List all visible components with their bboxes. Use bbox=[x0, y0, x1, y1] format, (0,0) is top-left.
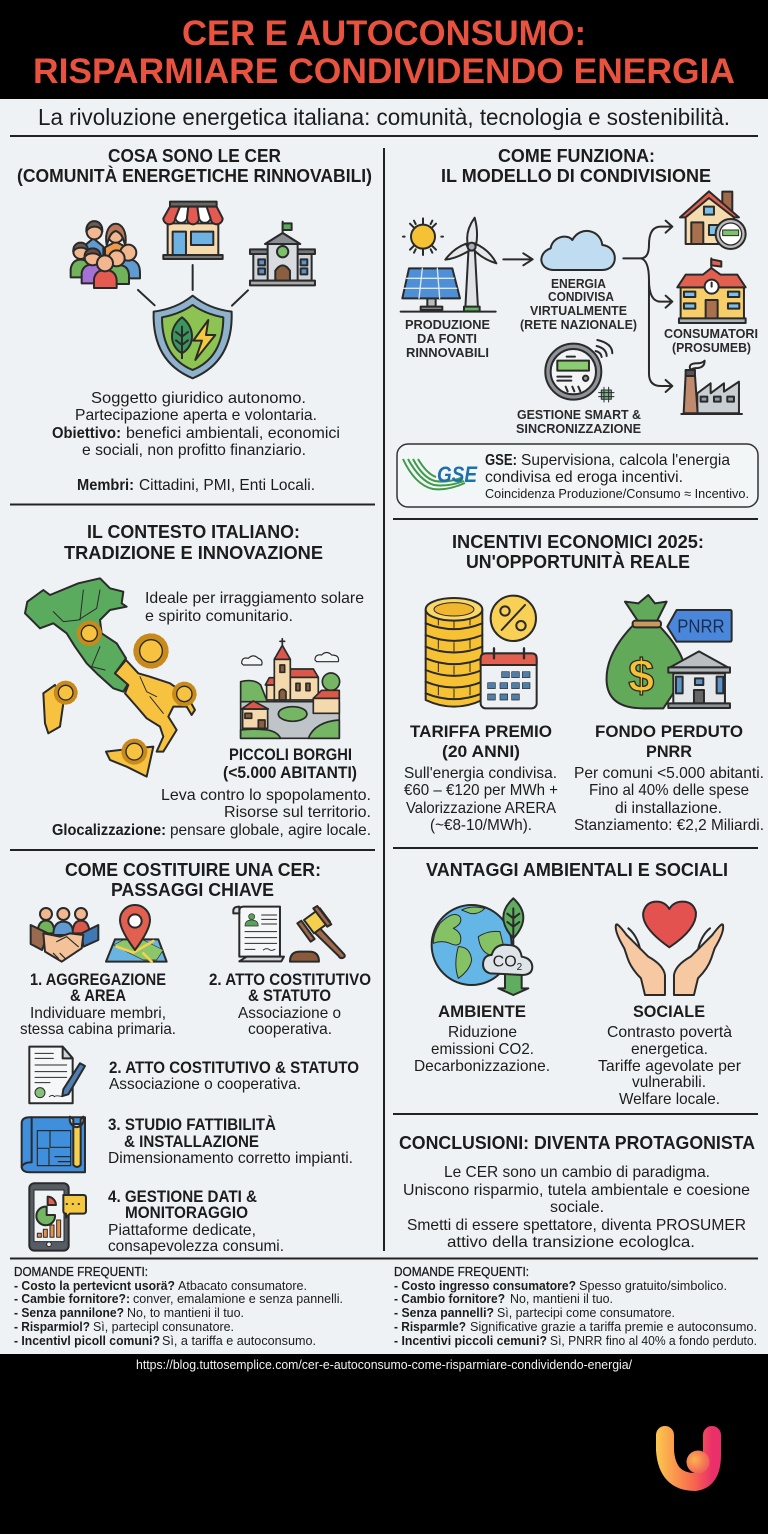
labels: tariffa premio: €60 – €120 per MWh + bbox=[404, 782, 558, 799]
icon: statute document bbox=[233, 907, 284, 961]
text: GSE role: Supervisiona, calcola l'energia bbox=[521, 452, 730, 469]
text: definition: Membri: bbox=[77, 477, 134, 494]
title: RISPARMIARE CONDIVIDENDO ENERGIA bbox=[33, 52, 735, 91]
icon: wind turbine bbox=[445, 218, 496, 311]
text: conclusioni: Le CER sono un cambio di paradigma. bbox=[444, 1164, 710, 1181]
text: sociale: energetica. bbox=[631, 1041, 708, 1058]
labels: flow steps: PRODUZIONE bbox=[405, 317, 490, 332]
heading: incentivi: INCENTIVI ECONOMICI 2025: bbox=[452, 531, 704, 552]
labels: fondo perduto: Per comuni <5.000 abitanti. bbox=[574, 765, 764, 782]
text: sociale bbox=[598, 1003, 741, 1108]
heading: contesto italiano bbox=[64, 521, 323, 563]
illustration: small village bbox=[241, 639, 340, 738]
FAQ: right column bbox=[394, 1265, 757, 1348]
heading: incentivi: UN'OPPORTUNITÀ REALE bbox=[466, 551, 690, 572]
text: ideal conditions bbox=[145, 590, 364, 625]
labels: piccoli borghi: (<5.000 ABITANTI) bbox=[223, 764, 357, 782]
FAQ: right column: - Cambio fornitore? bbox=[394, 1292, 505, 1306]
FAQ: left column: - Senza pannilone? bbox=[14, 1306, 124, 1320]
step 1: aggregazione bbox=[20, 971, 176, 1038]
text: ambiente bbox=[414, 1003, 550, 1075]
step 1: aggregazione: stessa cabina primaria. bbox=[20, 1021, 176, 1038]
icons: steps bbox=[22, 905, 345, 1251]
heading: come funziona: COME FUNZIONA: bbox=[498, 145, 655, 166]
text: conclusioni bbox=[403, 1164, 750, 1251]
icon: heart in hands bbox=[616, 902, 723, 995]
FAQ: left column: - Cambie fornitore?: bbox=[14, 1292, 130, 1306]
FAQ: right column: DOMANDE FREQUENTI: bbox=[394, 1265, 529, 1279]
arrow: to cloud bbox=[503, 253, 533, 265]
labels: flow steps: RINNOVABILI bbox=[406, 345, 489, 360]
text: ideal conditions: e spirito comunitario. bbox=[145, 608, 293, 625]
FAQ: left column: No, to mantieni il tuo. bbox=[127, 1306, 244, 1320]
icon: globe with CO2: 2 bbox=[517, 962, 523, 973]
text: conclusioni: sociale. bbox=[550, 1199, 604, 1216]
heading: passaggi chiave bbox=[65, 859, 321, 900]
labels: flow steps: (RETE NAZIONALE) bbox=[520, 317, 637, 332]
step 2: atto costitutivo: Associazione o bbox=[238, 1005, 341, 1022]
panel: vantaggi ambientali e sociali bbox=[414, 859, 741, 1108]
step 1: aggregazione: Individuare membri, bbox=[30, 1005, 166, 1022]
text: sociale: Contrasto povertà bbox=[607, 1024, 732, 1041]
text: definition: Partecipazione aperta e volontaria. bbox=[75, 407, 317, 424]
text: conclusioni: Uniscono risparmio, tutela ambientale e coesione bbox=[403, 1182, 750, 1199]
icon: shield with leaf and bolt bbox=[154, 296, 232, 378]
panel: come costituire una CER bbox=[20, 859, 371, 1255]
icons: coins, percent, calendar bbox=[426, 596, 537, 708]
FAQ: left column: - Costo la pertevicnt usorä? bbox=[14, 1279, 175, 1293]
heading: cosa sono le CER: COSA SONO LE CER bbox=[108, 145, 281, 166]
heading: contesto italiano: TRADIZIONE E INNOVAZIONE bbox=[64, 542, 323, 563]
step 4: gestione dati: consapevolezza consumi. bbox=[108, 1238, 284, 1255]
icons: members and shield bbox=[71, 202, 315, 378]
text: sociale: Welfare locale. bbox=[619, 1091, 720, 1108]
icon: school bbox=[677, 258, 746, 323]
FAQ: left column: - Incentivl picoll comuni? bbox=[14, 1334, 160, 1348]
icon: handshake team bbox=[31, 908, 98, 962]
icon: GSE logo: GSE bbox=[437, 462, 478, 487]
panel: cosa sono le CER bbox=[17, 145, 372, 494]
labels: flow steps: VIRTUALMENTE bbox=[530, 303, 627, 318]
labels: fondo perduto: Stanziamento: €2,2 Miliardi. bbox=[574, 817, 764, 834]
icons: globe and caring hands bbox=[432, 898, 723, 995]
text: ambiente: Riduzione bbox=[448, 1024, 517, 1041]
FAQ: right column: Sì, PNRR fino al 40% a fondo perduto. bbox=[550, 1334, 757, 1348]
text: sociale: Tariffe agevolate per bbox=[598, 1058, 741, 1075]
labels: flow steps: GESTIONE SMART & bbox=[517, 407, 641, 422]
icon: gavel bbox=[290, 906, 345, 962]
text: definition bbox=[52, 390, 340, 494]
icon: blueprint and wrench bbox=[22, 1117, 85, 1172]
FAQ: right column: Spesso gratuito/simbolico. bbox=[579, 1279, 727, 1293]
labels: fondo perduto: FONDO PERDUTO bbox=[595, 723, 743, 741]
FAQ: right column: Sì, partecipi come consumatore. bbox=[497, 1306, 675, 1320]
icon: cloud bbox=[541, 231, 615, 270]
panel: incentivi economici bbox=[404, 531, 764, 834]
step 3: studio fattibilità bbox=[108, 1115, 353, 1167]
text: GSE role: Coincidenza Produzione/Consumo ≈ Incentivo. bbox=[485, 486, 749, 501]
panel: come funziona bbox=[397, 145, 758, 507]
icon: factory bbox=[681, 361, 742, 414]
text: definition: benefici ambientali, economici bbox=[126, 425, 340, 442]
text: borghi benefits: Glocalizzazione: bbox=[52, 822, 166, 839]
source URL: https://blog.tuttosemplice.com/cer-e-autoconsumo-come-risparmiare-condividendo-energia/ bbox=[136, 1358, 633, 1372]
logo bbox=[665, 1435, 712, 1482]
icons: money bag, PNRR tag, bank: $ bbox=[628, 650, 654, 702]
icon: smart meter bbox=[545, 340, 614, 402]
icon: map pin bbox=[106, 905, 167, 962]
FAQ: right column: - Risparmle? bbox=[394, 1320, 466, 1334]
FAQ: right column: - Costo ingresso consumatore? bbox=[394, 1279, 576, 1293]
labels: fondo perduto: di installazione. bbox=[615, 800, 722, 817]
text: definition: e sociali, non profitto finanziario. bbox=[82, 442, 306, 459]
icons: money bag, PNRR tag, bank bbox=[607, 595, 732, 708]
step 3: studio fattibilità: 3. STUDIO FATTIBILITÀ bbox=[108, 1115, 276, 1134]
text: ambiente: Decarbonizzazione. bbox=[414, 1058, 550, 1075]
text: definition: Cittadini, PMI, Enti Locali. bbox=[139, 477, 315, 494]
heading: passaggi chiave: PASSAGGI CHIAVE bbox=[111, 879, 274, 900]
labels: tariffa premio: Sull'energia condivisa. bbox=[404, 765, 557, 782]
icon: GSE logo bbox=[403, 459, 478, 489]
text: ambiente: AMBIENTE bbox=[438, 1003, 526, 1021]
labels: tariffa premio bbox=[404, 723, 558, 834]
heading: come funziona bbox=[441, 145, 711, 186]
labels: piccoli borghi bbox=[223, 746, 357, 782]
step 4: gestione dati: MONITORAGGIO bbox=[125, 1204, 248, 1222]
text: GSE role: condivisa ed eroga incentivi. bbox=[485, 469, 683, 486]
labels: flow steps: SINCRONIZZAZIONE bbox=[516, 421, 641, 436]
step 1: aggregazione: & AREA bbox=[70, 987, 126, 1005]
step 2 repeated: atto costitutivo bbox=[109, 1059, 359, 1093]
text: sociale: vulnerabili. bbox=[632, 1074, 706, 1091]
FAQ: left column bbox=[14, 1265, 343, 1348]
step 2: atto costitutivo: cooperativa. bbox=[248, 1021, 332, 1038]
text: ideal conditions: Ideale per irraggiamento solare bbox=[145, 590, 364, 607]
FAQ: left column: Sì, partecipl consunatore. bbox=[93, 1320, 234, 1334]
text: sociale: SOCIALE bbox=[633, 1003, 705, 1021]
labels: piccoli borghi: PICCOLI BORGHI bbox=[229, 746, 352, 764]
heading: incentivi bbox=[452, 531, 704, 572]
text: borghi benefits: pensare globale, agire locale. bbox=[170, 822, 371, 839]
step 3: studio fattibilità: Dimensionamento corretto impianti. bbox=[108, 1150, 353, 1167]
labels: flow steps: ENERGIA bbox=[551, 276, 606, 291]
heading: vantaggi: VANTAGGI AMBIENTALI E SOCIALI bbox=[426, 859, 728, 880]
step 4: gestione dati: Piattaforme dedicate, bbox=[108, 1222, 256, 1239]
text: borghi benefits: Risorse sul territorio. bbox=[224, 804, 371, 821]
FAQ: right column: - Senza pannelli? bbox=[394, 1306, 494, 1320]
heading: passaggi chiave: COME COSTITUIRE UNA CER: bbox=[65, 859, 321, 880]
text: GSE role bbox=[485, 452, 749, 501]
labels: fondo perduto: Fino al 40% delle spese bbox=[589, 782, 749, 799]
icon: document with pen bbox=[29, 1047, 85, 1103]
labels: tariffa premio: (~€8-10/MWh). bbox=[430, 817, 532, 834]
FAQ: left column: Atbacato consumatore. bbox=[178, 1279, 307, 1293]
diagram: energy flow bbox=[401, 191, 746, 414]
text: ambiente: emissioni CO2. bbox=[431, 1041, 534, 1058]
step 1: aggregazione: 1. AGGREGAZIONE bbox=[30, 971, 166, 989]
icon: people group bbox=[71, 221, 140, 288]
labels: tariffa premio: Valorizzazione ARERA bbox=[406, 800, 556, 817]
icon: solar panel bbox=[402, 268, 460, 310]
step 2: atto costitutivo bbox=[209, 971, 371, 1038]
labels: tariffa premio: TARIFFA PREMIO bbox=[410, 723, 552, 741]
heading: conclusioni: CONCLUSIONI: DIVENTA PROTAGONISTA bbox=[399, 1133, 755, 1153]
icon: shop bbox=[163, 202, 223, 259]
text: conclusioni: Smetti di essere spettatore, diventa PROSUMER bbox=[407, 1217, 746, 1234]
step 2: atto costitutivo: & STATUTO bbox=[248, 987, 331, 1005]
FAQ: left column: Sì, a tariffa e autoconsumo. bbox=[162, 1334, 316, 1348]
icon: sun bbox=[403, 218, 443, 255]
arrows: branching to consumers bbox=[623, 221, 672, 392]
step 2 repeated: atto costitutivo: Associazione o cooperativa. bbox=[109, 1076, 301, 1093]
text: definition: Soggetto giuridico autonomo. bbox=[91, 390, 306, 407]
FAQ: left column: - Risparmiol? bbox=[14, 1320, 90, 1334]
FAQ: right column: - Incentivi piccoli cemuni? bbox=[394, 1334, 547, 1348]
labels: flow steps bbox=[405, 276, 758, 436]
FAQ: right column: Significative grazie a tariffa premie e autoconsumo. bbox=[470, 1320, 757, 1334]
labels: fondo perduto bbox=[574, 723, 764, 834]
step 3: studio fattibilità: & INSTALLAZIONE bbox=[124, 1133, 259, 1151]
title bbox=[33, 14, 735, 91]
labels: tariffa premio: (20 ANNI) bbox=[442, 743, 520, 761]
heading: contesto italiano: IL CONTESTO ITALIANO: bbox=[87, 521, 300, 542]
icon: smartphone with charts bbox=[29, 1183, 86, 1251]
FAQ: left column: conver, emalamione e senza pannelli. bbox=[133, 1292, 343, 1306]
title: CER E AUTOCONSUMO: bbox=[182, 14, 586, 53]
panel: contesto italiano bbox=[25, 521, 371, 839]
text: definition: Obiettivo: bbox=[52, 425, 121, 442]
icons: money bag, PNRR tag, bank: PNRR bbox=[677, 616, 725, 637]
step 2 repeated: atto costitutivo: 2. ATTO COSTITUTIVO & STATUTO bbox=[109, 1059, 359, 1077]
heading: cosa sono le CER bbox=[17, 145, 372, 186]
FAQ: right column: No, mantieni il tuo. bbox=[510, 1292, 613, 1306]
panel: conclusioni bbox=[399, 1133, 755, 1251]
text: conclusioni: attivo della transizione ecologlca. bbox=[447, 1234, 695, 1251]
labels: flow steps: CONSUMATORI bbox=[664, 326, 758, 341]
icon: globe with CO2 bbox=[432, 898, 532, 995]
icon: town hall bbox=[250, 222, 315, 285]
step 4: gestione dati: 4. GESTIONE DATI & bbox=[108, 1188, 257, 1206]
icon: house with meter bbox=[680, 191, 746, 249]
step 2: atto costitutivo: 2. ATTO COSTITUTIVO bbox=[209, 971, 371, 989]
callout: GSE bbox=[397, 444, 758, 507]
labels: fondo perduto: PNRR bbox=[646, 743, 692, 761]
FAQ: left column: DOMANDE FREQUENTI: bbox=[14, 1265, 148, 1279]
text: GSE role: GSE: bbox=[485, 452, 517, 469]
step 4: gestione dati bbox=[108, 1188, 284, 1255]
icon: globe with CO2: CO bbox=[493, 954, 517, 971]
heading: cosa sono le CER: (COMUNITÀ ENERGETICHE RINNOVABILI) bbox=[17, 165, 372, 186]
labels: flow steps: DA FONTI bbox=[417, 331, 477, 346]
text: borghi benefits: Leva contro lo spopolamento. bbox=[161, 787, 371, 804]
heading: come funziona: IL MODELLO DI CONDIVISIONE bbox=[441, 165, 711, 186]
labels: flow steps: (PROSUMEB) bbox=[672, 340, 751, 355]
labels: flow steps: CONDIVISA bbox=[548, 289, 614, 304]
text: borghi benefits bbox=[52, 787, 371, 839]
subtitle: La rivoluzione energetica italiana: comunità, tecnologia e sostenibilità. bbox=[38, 104, 730, 130]
map: Italy with suns bbox=[25, 578, 340, 777]
